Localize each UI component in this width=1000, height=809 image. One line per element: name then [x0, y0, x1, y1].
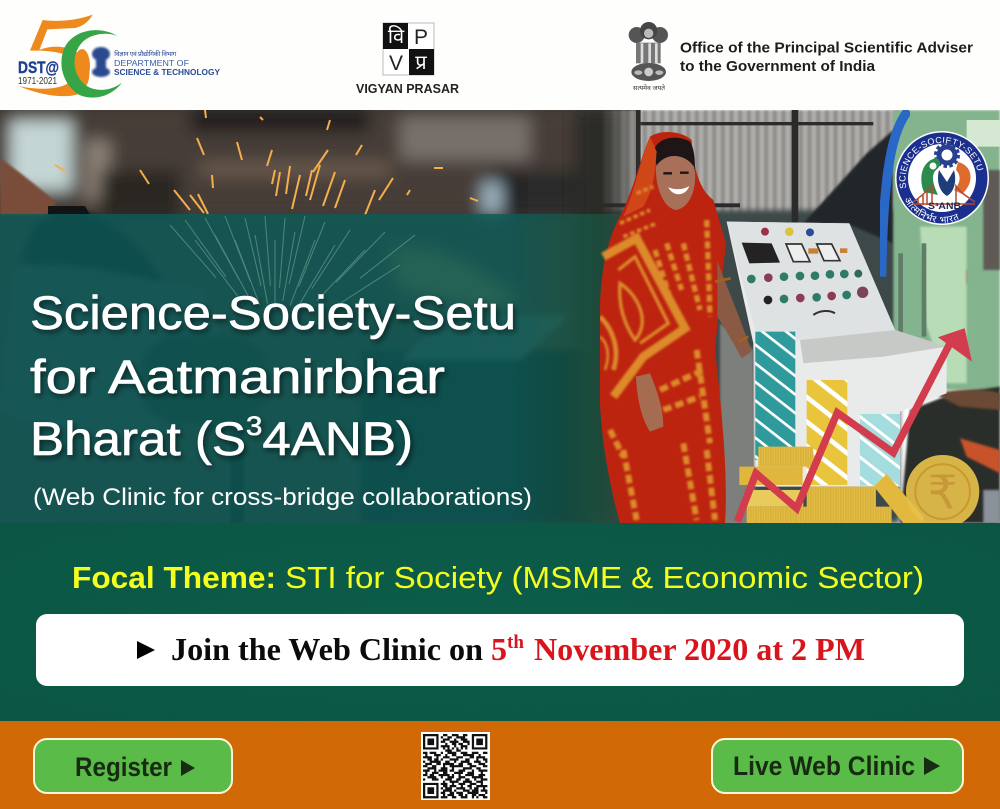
footer band	[0, 721, 1000, 809]
sparks upper	[55, 110, 478, 215]
rupee coin	[906, 455, 979, 528]
smile	[668, 186, 689, 194]
icon: national emblem small	[92, 47, 110, 77]
teal title overlay	[0, 214, 640, 523]
face	[656, 156, 695, 210]
date number: th	[507, 632, 524, 653]
icon: national emblem	[629, 22, 668, 81]
checker mark	[383, 23, 434, 75]
bridge	[913, 186, 975, 205]
years: 1971-2021	[18, 76, 57, 87]
icon: green crescent	[61, 30, 122, 98]
focal theme heading: STI for Society (MSME & Economic Sector)	[285, 560, 924, 595]
title line 2: for Aatmanirbhar	[30, 350, 445, 403]
icon: orange inner oval	[74, 49, 90, 83]
rupee coin: ₹	[928, 466, 957, 520]
hero photo: left grinder scene	[0, 110, 640, 523]
Hindi department name: विज्ञान एवं प्रौद्योगिकी विभाग	[114, 50, 177, 58]
panel: join date box	[36, 614, 964, 686]
logo: Principal Scientific Adviser	[629, 22, 973, 92]
button: Register: Register	[75, 752, 172, 782]
QR code	[421, 732, 490, 800]
coins	[739, 447, 923, 523]
button: Live Web Clinic	[712, 739, 963, 793]
background wall	[600, 110, 900, 523]
checker mark: प्र	[415, 52, 427, 74]
orange figure	[954, 162, 971, 194]
control panel	[727, 222, 947, 487]
green figure head	[930, 162, 936, 170]
checker mark: वि	[388, 25, 405, 48]
skin forearm left	[636, 373, 663, 432]
logo: DST 50 years	[18, 15, 220, 98]
icon: orange numeral five	[19, 15, 93, 96]
title line 3: 3	[246, 411, 262, 441]
checker mark: P	[414, 26, 428, 49]
white box	[36, 614, 964, 686]
hand and glove	[0, 158, 56, 215]
title	[30, 286, 516, 465]
emblem motto: सत्यमेव जयते	[633, 84, 665, 92]
gear	[936, 144, 958, 166]
button: Live Web Clinic: Live Web Clinic	[733, 751, 915, 781]
ring text bottom: आत्मनिर्भर भारत	[906, 198, 959, 223]
ring text top: SCIENCE-SOCIETY-SETU	[899, 136, 984, 188]
title line 3: 4ANB)	[262, 412, 413, 465]
button: Register	[34, 739, 232, 793]
blue figure	[938, 170, 955, 196]
rising red arrow	[737, 328, 972, 522]
panel displays	[742, 243, 780, 263]
sari	[600, 132, 726, 523]
spark fan under tint	[170, 216, 415, 345]
header band	[0, 0, 1000, 110]
hair	[653, 138, 695, 170]
office name line 1: Office of the Principal Scientific Adviser	[680, 40, 973, 56]
panel: focal theme green board	[0, 523, 1000, 721]
acronym: S³ANB	[928, 201, 962, 211]
focal theme heading: Focal Theme:	[72, 560, 276, 595]
hero photo: right factory scene	[600, 110, 1000, 528]
woman	[600, 132, 755, 523]
date number: 5	[491, 631, 507, 667]
department name: DEPARTMENT OF	[114, 58, 189, 68]
join text: Join the Web Clinic on	[171, 631, 483, 667]
sari border patterns	[600, 187, 715, 520]
green figure	[921, 158, 940, 195]
blue pipe	[882, 110, 908, 277]
bangle	[715, 278, 748, 342]
subtitle: (Web Clinic for cross-bridge collaborations)	[33, 484, 532, 511]
shadow beside woman	[720, 323, 755, 523]
logo: Vigyan Prasar	[356, 23, 459, 96]
checker mark: V	[389, 52, 403, 75]
dark lower right	[900, 387, 1000, 523]
green machine	[893, 110, 1000, 390]
eyes	[663, 169, 689, 177]
title line 3: Bharat (S	[30, 412, 229, 465]
badge: S3ANB logo	[895, 131, 989, 225]
dark staircase	[803, 130, 893, 243]
badge ring	[895, 131, 989, 225]
department name bold: SCIENCE & TECHNOLOGY	[114, 67, 220, 77]
arrow	[137, 641, 155, 659]
skin arm right	[717, 260, 752, 358]
veil	[623, 137, 657, 217]
panel buttons	[747, 227, 868, 315]
striped bars	[755, 332, 900, 486]
DST wordmark: DST@	[18, 58, 59, 77]
title line 1: Science-Society-Setu	[30, 286, 516, 339]
office name line 2: to the Government of India	[680, 58, 876, 75]
name: VIGYAN PRASAR	[356, 82, 459, 96]
date text: November 2020 at 2 PM	[534, 631, 865, 667]
